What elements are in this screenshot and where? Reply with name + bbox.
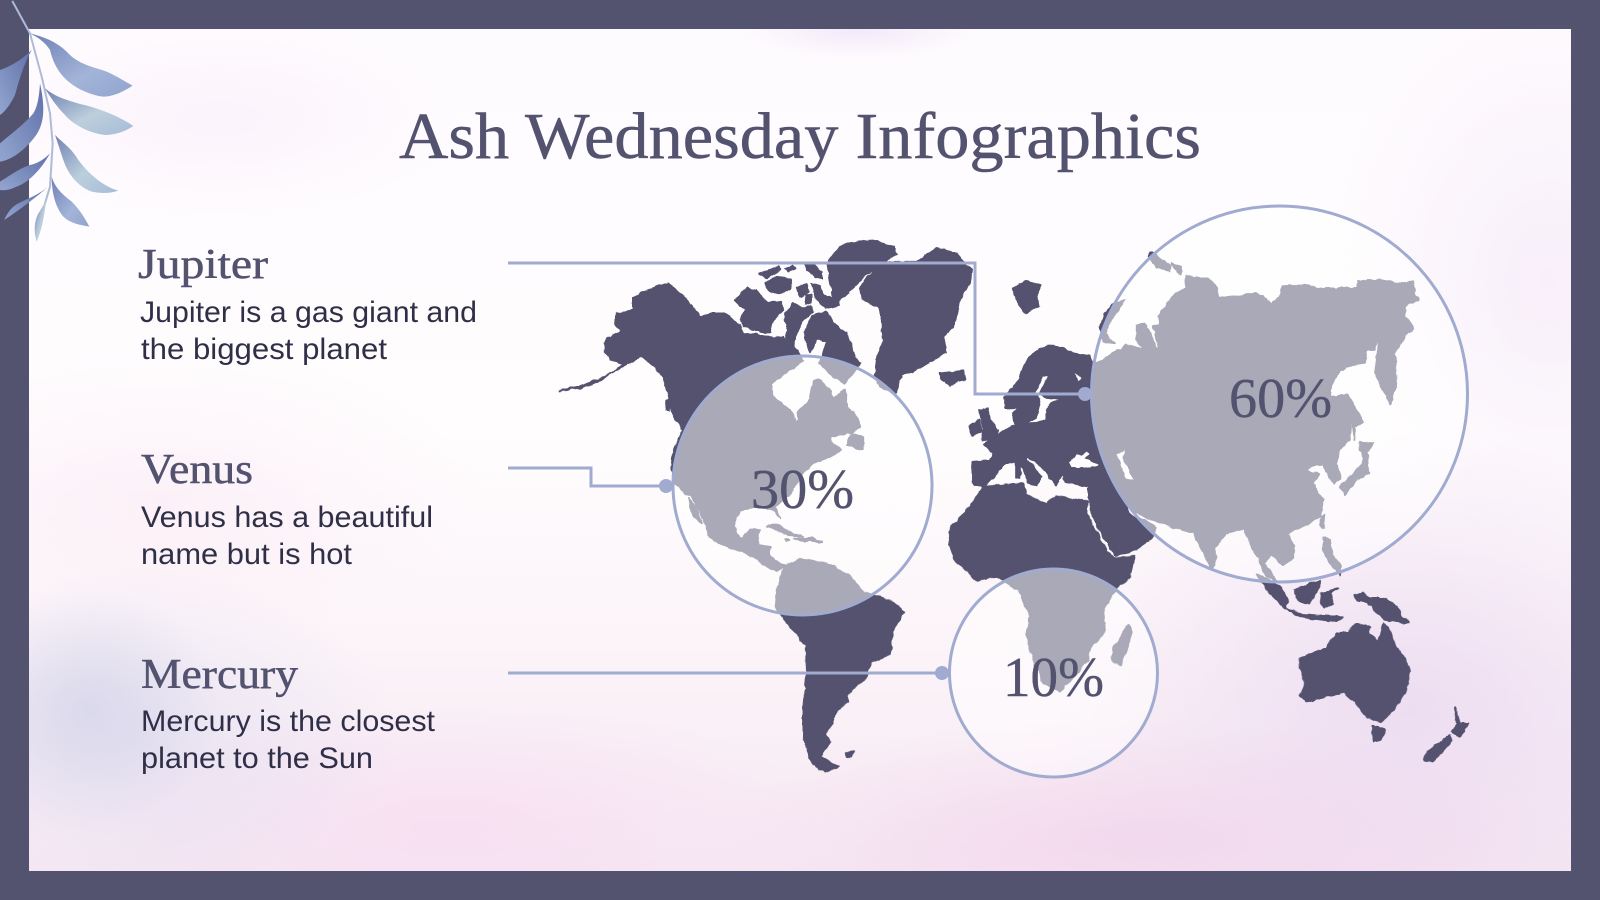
text block: Mercury: Mercury — [141, 652, 298, 698]
callout circle: 10% — [950, 569, 1158, 777]
text block: Mercury: planet to the Sun — [141, 742, 373, 775]
map: Southeast Asia, Australia, New Zealand — [1257, 575, 1468, 762]
callout circle: 60% — [1092, 206, 1468, 582]
text block: Jupiter: Jupiter — [138, 242, 268, 288]
text block: Venus: name but is hot — [141, 538, 353, 571]
map: North America and Greenland — [560, 240, 972, 572]
text block: Mercury — [141, 652, 436, 775]
map: Sakhalin, Japan, Taiwan, Philippines — [1348, 395, 1363, 440]
callout circle: 60%: 60% — [1229, 368, 1332, 430]
text block: Mercury: Mercury is the closest — [141, 705, 436, 738]
map: Eurasia — [969, 252, 1418, 582]
map: Novaya Zemlya and Arctic islands — [1100, 300, 1125, 343]
text block: Venus: Venus — [141, 447, 253, 493]
text block: Venus: Venus has a beautiful — [141, 501, 433, 534]
text block: Jupiter: Jupiter is a gas giant and — [140, 296, 477, 329]
text block: Venus — [141, 447, 433, 571]
text block: Jupiter — [138, 242, 477, 366]
map: Africa and South America — [775, 483, 1135, 772]
callout circle: 10%: 10% — [1003, 647, 1104, 709]
connector: Jupiter to 60% — [508, 263, 1092, 401]
callout circle: 30%: 30% — [751, 459, 854, 521]
connector: Mercury to 10% — [508, 666, 949, 680]
title: Ash Wednesday Infographics — [399, 100, 1201, 173]
icon: leaf branch decoration — [0, 2, 133, 242]
callout circle: 30% — [673, 356, 932, 615]
connector: Venus to 30% — [508, 468, 673, 493]
text block: Jupiter: the biggest planet — [141, 333, 388, 366]
world map — [560, 240, 1468, 772]
